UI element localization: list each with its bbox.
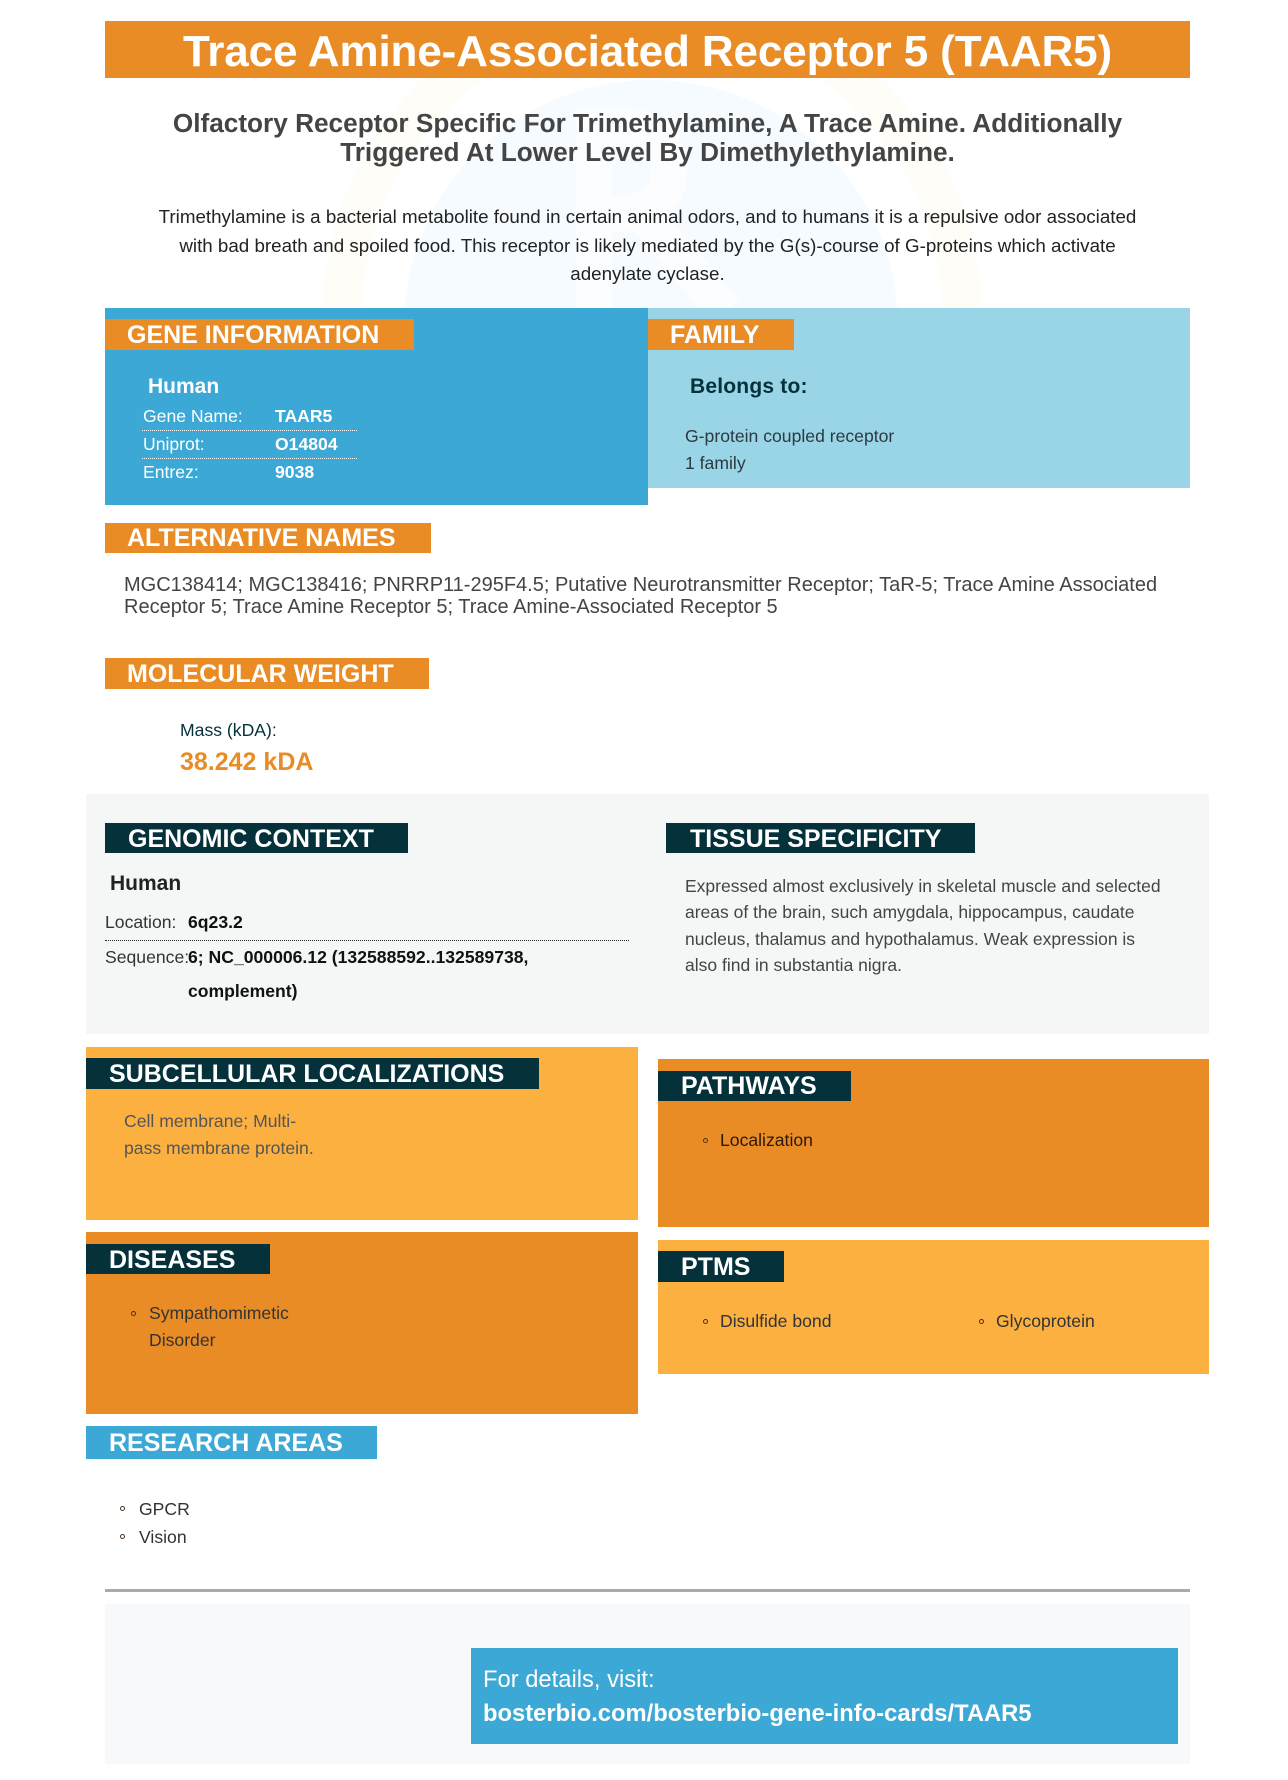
heading: ptms: PTMS <box>681 1253 750 1281</box>
call to action box <box>471 1648 1178 1744</box>
research area list: Vision <box>139 1527 187 1547</box>
subtitle: Olfactory Receptor Specific For Trimethylamine, A Trace Amine. Additionally <box>173 108 1122 138</box>
heading: alternative names: ALTERNATIVE NAMES <box>127 524 396 552</box>
gene facts <box>142 406 357 482</box>
heading: molecular weight: MOLECULAR WEIGHT <box>127 660 394 688</box>
family text: G-protein coupled receptor <box>685 426 894 446</box>
gene facts: Uniprot: <box>143 434 205 454</box>
localization text: pass membrane protein. <box>124 1138 314 1158</box>
species label: Human <box>148 375 219 398</box>
localization text: Cell membrane; Multi- <box>124 1111 296 1131</box>
localization text <box>124 1111 314 1158</box>
ptm item: disulfide bond: Disulfide bond <box>720 1311 832 1331</box>
family text <box>685 426 894 473</box>
tissue specificity text: nucleus, thalamus and hypothalamus. Weak expression is <box>685 929 1135 949</box>
mass value: 38.242 kDA <box>180 748 313 776</box>
panel: genomic context and tissue specificity: complement) <box>188 981 298 1001</box>
family text: 1 family <box>685 453 746 473</box>
disease item <box>131 1303 289 1350</box>
intro paragraph <box>159 206 1136 284</box>
research area list <box>120 1499 190 1547</box>
footer divider <box>105 1589 1190 1592</box>
panel: gene information <box>105 308 648 505</box>
research area list: GPCR <box>139 1499 190 1519</box>
panel: subcellular localizations <box>86 1047 638 1220</box>
panel: ptms <box>658 1240 1209 1374</box>
background watermark logo <box>405 80 897 308</box>
title banner: Trace Amine-Associated Receptor 5 (TAAR5) <box>183 27 1112 76</box>
subtitle: Triggered At Lower Level By Dimethylethylamine. <box>340 137 955 167</box>
intro paragraph: adenylate cyclase. <box>570 263 725 284</box>
sequence row: Sequence: <box>105 947 189 967</box>
tissue specificity text <box>685 876 1161 975</box>
gene facts: 9038 <box>275 462 314 482</box>
species label: Human <box>110 872 181 895</box>
tissue specificity text: also find in substantia nigra. <box>685 955 902 975</box>
panel: genomic context and tissue specificity: 6; NC_000006.12 (132588592..132589738, <box>188 947 528 967</box>
call to action box: bosterbio.com/bosterbio-gene-info-cards/TAAR5 <box>483 1700 1032 1727</box>
alternative names text <box>124 574 1157 618</box>
heading: tissue specificity: TISSUE SPECIFICITY <box>690 825 941 853</box>
heading: gene information: GENE INFORMATION <box>127 321 379 349</box>
heading: family <box>648 319 794 350</box>
intro paragraph: Trimethylamine is a bacterial metabolite found in certain animal odors, and to humans it is a repulsive odor associated <box>159 206 1136 227</box>
panel: family <box>648 308 1190 488</box>
call to action box: For details, visit: <box>483 1666 655 1693</box>
intro paragraph: with bad breath and spoiled food. This receptor is likely mediated by the G(s)-course of G-proteins which activate <box>179 235 1116 256</box>
heading: family: FAMILY <box>670 321 759 349</box>
panel: genomic context and tissue specificity: 6q23.2 <box>188 912 243 932</box>
pathway item: Localization <box>720 1130 813 1150</box>
mass label: Mass (kDA): <box>180 720 277 740</box>
ptm item: glycoprotein: Glycoprotein <box>996 1311 1095 1331</box>
footer panel <box>105 1604 1190 1764</box>
heading: research areas <box>86 1426 377 1459</box>
heading: diseases <box>86 1244 270 1274</box>
heading: diseases: DISEASES <box>109 1246 235 1274</box>
heading: pathways: PATHWAYS <box>681 1072 817 1100</box>
belongs to label: Belongs to: <box>690 375 808 398</box>
gene facts: O14804 <box>275 434 338 454</box>
tissue specificity text: Expressed almost exclusively in skeletal muscle and selected <box>685 876 1161 896</box>
heading: subcellular localizations: SUBCELLULAR LOCALIZATIONS <box>109 1060 504 1088</box>
gene facts: TAAR5 <box>275 406 332 426</box>
heading: pathways <box>658 1071 851 1101</box>
subtitle <box>173 108 1122 167</box>
location row: Location: <box>105 912 176 932</box>
disease item: Sympathomimetic <box>149 1303 289 1323</box>
tissue specificity text: areas of the brain, such amygdala, hippocampus, caudate <box>685 902 1134 922</box>
panel: diseases <box>86 1232 638 1414</box>
alternative names text: MGC138414; MGC138416; PNRRP11-295F4.5; Putative Neurotransmitter Receptor; TaR-5; Trace Amine Associated <box>124 574 1157 596</box>
disease item: Disorder <box>149 1330 215 1350</box>
panel: genomic context and tissue specificity <box>86 794 1209 1034</box>
heading: ptms <box>658 1251 784 1282</box>
alternative names text: Receptor 5; Trace Amine Receptor 5; Trace Amine-Associated Receptor 5 <box>124 596 778 618</box>
heading: research areas: RESEARCH AREAS <box>109 1429 343 1457</box>
gene facts: Gene Name: <box>143 406 243 426</box>
heading: genomic context: GENOMIC CONTEXT <box>128 825 374 853</box>
gene facts: Entrez: <box>143 462 199 482</box>
panel: pathways <box>658 1059 1209 1227</box>
